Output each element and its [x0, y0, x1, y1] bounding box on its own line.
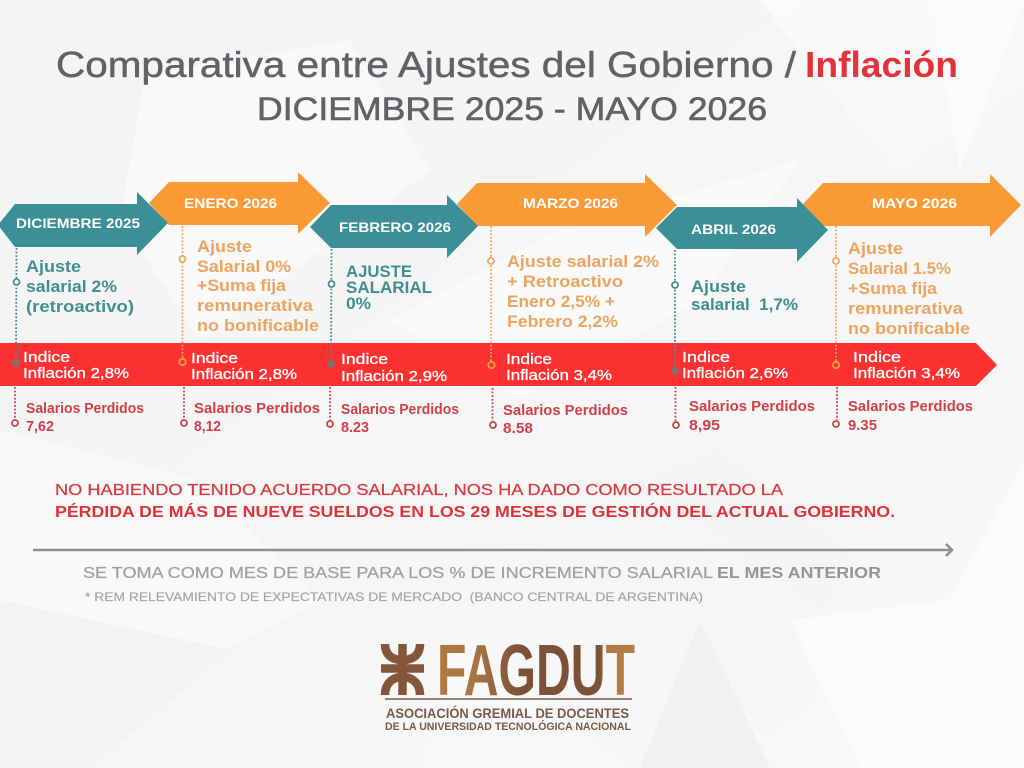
- column: mayo 2026: 9.35: [848, 418, 877, 434]
- note: base month: [83, 565, 881, 582]
- arrow: febrero 2026: FEBRERO 2026: [339, 220, 452, 235]
- title: DICIEMBRE 2025 - MAYO 2026: [257, 91, 767, 127]
- arrow: diciembre 2025: DICIEMBRE 2025: [16, 216, 141, 231]
- column: diciembre 2025: (retroactivo): [26, 298, 134, 316]
- column: abril 2026: Indice: [682, 350, 730, 366]
- arrow: gray timeline: [33, 544, 952, 556]
- arrow: enero 2026: ENERO 2026: [184, 196, 278, 211]
- column: febrero 2026: Salarios Perdidos: [341, 402, 459, 418]
- column: enero 2026: 8,12: [194, 419, 221, 435]
- footnote: * REM RELEVAMIENTO DE EXPECTATIVAS DE MERCADO (BANCO CENTRAL DE ARGENTINA): [85, 592, 703, 604]
- icon: UTN symbol: [381, 644, 424, 695]
- tagline: ASOCIACIÓN GREMIAL DE DOCENTES: [386, 704, 629, 721]
- column: marzo 2026: [488, 226, 659, 437]
- column: enero 2026: +Suma fija: [197, 277, 287, 295]
- column: diciembre 2025: salarial 2%: [26, 278, 117, 296]
- arrow: febrero 2026: [310, 195, 478, 258]
- column: mayo 2026: Salarial 1.5%: [848, 260, 951, 278]
- column: mayo 2026: Ajuste: [848, 240, 903, 258]
- column: enero 2026: [179, 226, 320, 435]
- column: marzo 2026: Febrero 2,2%: [507, 313, 618, 331]
- column: diciembre 2025: 7,62: [26, 419, 54, 435]
- column: marzo 2026: Salarios Perdidos: [503, 403, 628, 419]
- conclusion text: NO HABIENDO TENIDO ACUERDO SALARIAL, NOS HA DADO COMO RESULTADO LA: [55, 482, 784, 499]
- column: diciembre 2025: [12, 248, 144, 435]
- conclusion text: [55, 482, 895, 521]
- column: abril 2026: Salarios Perdidos: [689, 399, 815, 415]
- column: febrero 2026: AJUSTE: [346, 263, 412, 281]
- logo: FAGDUT: [381, 631, 635, 733]
- wordmark: FAGDUT: [437, 631, 635, 711]
- title: Comparativa entre Ajustes del Gobierno /: [56, 44, 796, 85]
- column: diciembre 2025: Inflación 2,8%: [23, 366, 129, 382]
- arrow: diciembre 2025: [0, 192, 168, 255]
- column: mayo 2026: Inflación 3,4%: [853, 366, 960, 382]
- red inflation band: [0, 343, 997, 386]
- column: febrero 2026: 8.23: [341, 420, 369, 436]
- column: diciembre 2025: Ajuste: [26, 258, 81, 276]
- column: enero 2026: Salarios Perdidos: [194, 401, 320, 417]
- column: enero 2026: remunerativa: [197, 297, 314, 315]
- column: enero 2026: Inflación 2,8%: [191, 367, 297, 383]
- column: abril 2026: Ajuste: [691, 278, 746, 296]
- column: enero 2026: Indice: [191, 351, 238, 367]
- column: mayo 2026: [833, 226, 973, 434]
- column: marzo 2026: 8.58: [503, 421, 533, 437]
- column: marzo 2026: Indice: [506, 352, 552, 368]
- column: febrero 2026: Inflación 2,9%: [341, 369, 447, 385]
- arrow: marzo 2026: MARZO 2026: [523, 196, 619, 211]
- logo: FAGDUT: DE LA UNIVERSIDAD TECNOLÓGICA NACIONAL: [385, 720, 631, 733]
- column: diciembre 2025: Salarios Perdidos: [26, 401, 144, 417]
- column: marzo 2026: Inflación 3,4%: [506, 368, 612, 384]
- column: febrero 2026: [327, 249, 459, 436]
- column: abril 2026: Inflación 2,6%: [682, 366, 788, 382]
- arrow: enero 2026: [149, 172, 330, 234]
- column: diciembre 2025: Indice: [23, 350, 70, 366]
- column: febrero 2026: Indice: [341, 352, 388, 368]
- column: mayo 2026: +Suma fija: [848, 280, 938, 298]
- note: base month: EL MES ANTERIOR: [717, 565, 881, 582]
- column: mayo 2026: Salarios Perdidos: [848, 399, 973, 415]
- column: marzo 2026: Ajuste salarial 2%: [507, 253, 659, 271]
- arrow: mayo 2026: [803, 174, 1021, 237]
- title: Inflación: [805, 44, 958, 85]
- title: [56, 44, 958, 127]
- arrow: marzo 2026: [457, 174, 677, 237]
- column: mayo 2026: Indice: [853, 350, 901, 366]
- arrow: mayo 2026: MAYO 2026: [872, 196, 958, 211]
- column: enero 2026: Ajuste: [197, 238, 252, 256]
- column: febrero 2026: SALARIAL: [346, 279, 432, 297]
- column: enero 2026: no bonificable: [197, 317, 319, 335]
- column: abril 2026: 8,95: [689, 418, 720, 434]
- conclusion text: PÉRDIDA DE MÁS DE NUEVE SUELDOS EN LOS 29 MESES DE GESTIÓN DEL ACTUAL GOBIERNO.: [55, 503, 895, 521]
- column: marzo 2026: Enero 2,5% +: [507, 293, 615, 311]
- column: febrero 2026: 0%: [346, 295, 371, 313]
- column: enero 2026: Salarial 0%: [197, 258, 291, 276]
- arrow: abril 2026: [656, 198, 828, 262]
- arrow: abril 2026: ABRIL 2026: [691, 222, 777, 237]
- column: abril 2026: salarial 1,7%: [691, 296, 798, 314]
- column: abril 2026: [671, 250, 815, 434]
- note: base month: SE TOMA COMO MES DE BASE PARA LOS % DE INCREMENTO SALARIAL: [83, 565, 713, 582]
- column: mayo 2026: remunerativa: [848, 300, 964, 318]
- column: mayo 2026: no bonificable: [848, 320, 970, 338]
- column: marzo 2026: + Retroactivo: [507, 273, 623, 291]
